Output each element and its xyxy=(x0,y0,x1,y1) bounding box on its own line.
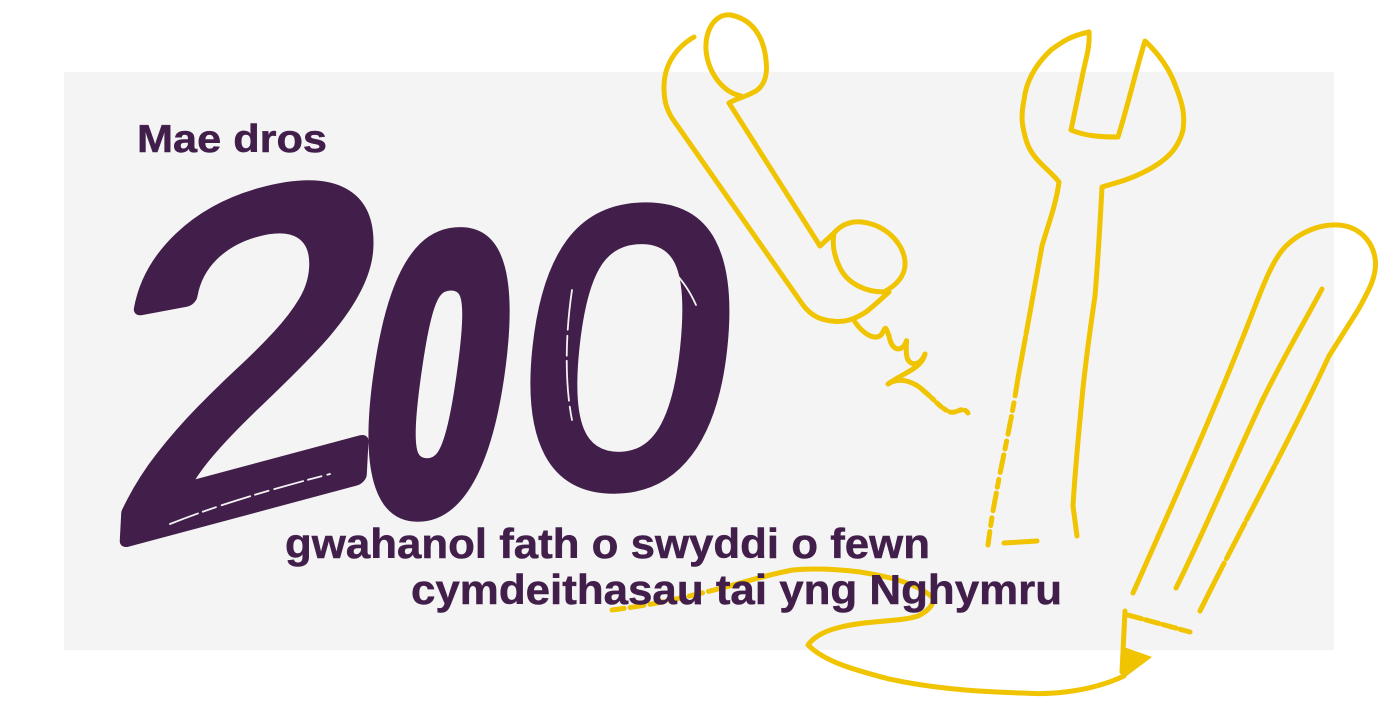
number: 200: 0 xyxy=(501,130,758,567)
text: description xyxy=(285,520,1062,613)
icon: pencil with drawn line xyxy=(612,225,1376,694)
icon: spanner xyxy=(988,32,1184,545)
text: lead-in: Mae dros xyxy=(137,118,327,161)
number: 200 xyxy=(99,67,758,640)
panel: grey background xyxy=(64,72,1334,650)
text: description: gwahanol fath o swyddi o fewn xyxy=(285,520,930,567)
number: 200: 0 xyxy=(341,158,538,589)
icon: telephone handset xyxy=(664,15,968,413)
number: 200: 2 xyxy=(99,67,404,640)
text: description: cymdeithasau tai yng Nghymru xyxy=(411,566,1062,613)
